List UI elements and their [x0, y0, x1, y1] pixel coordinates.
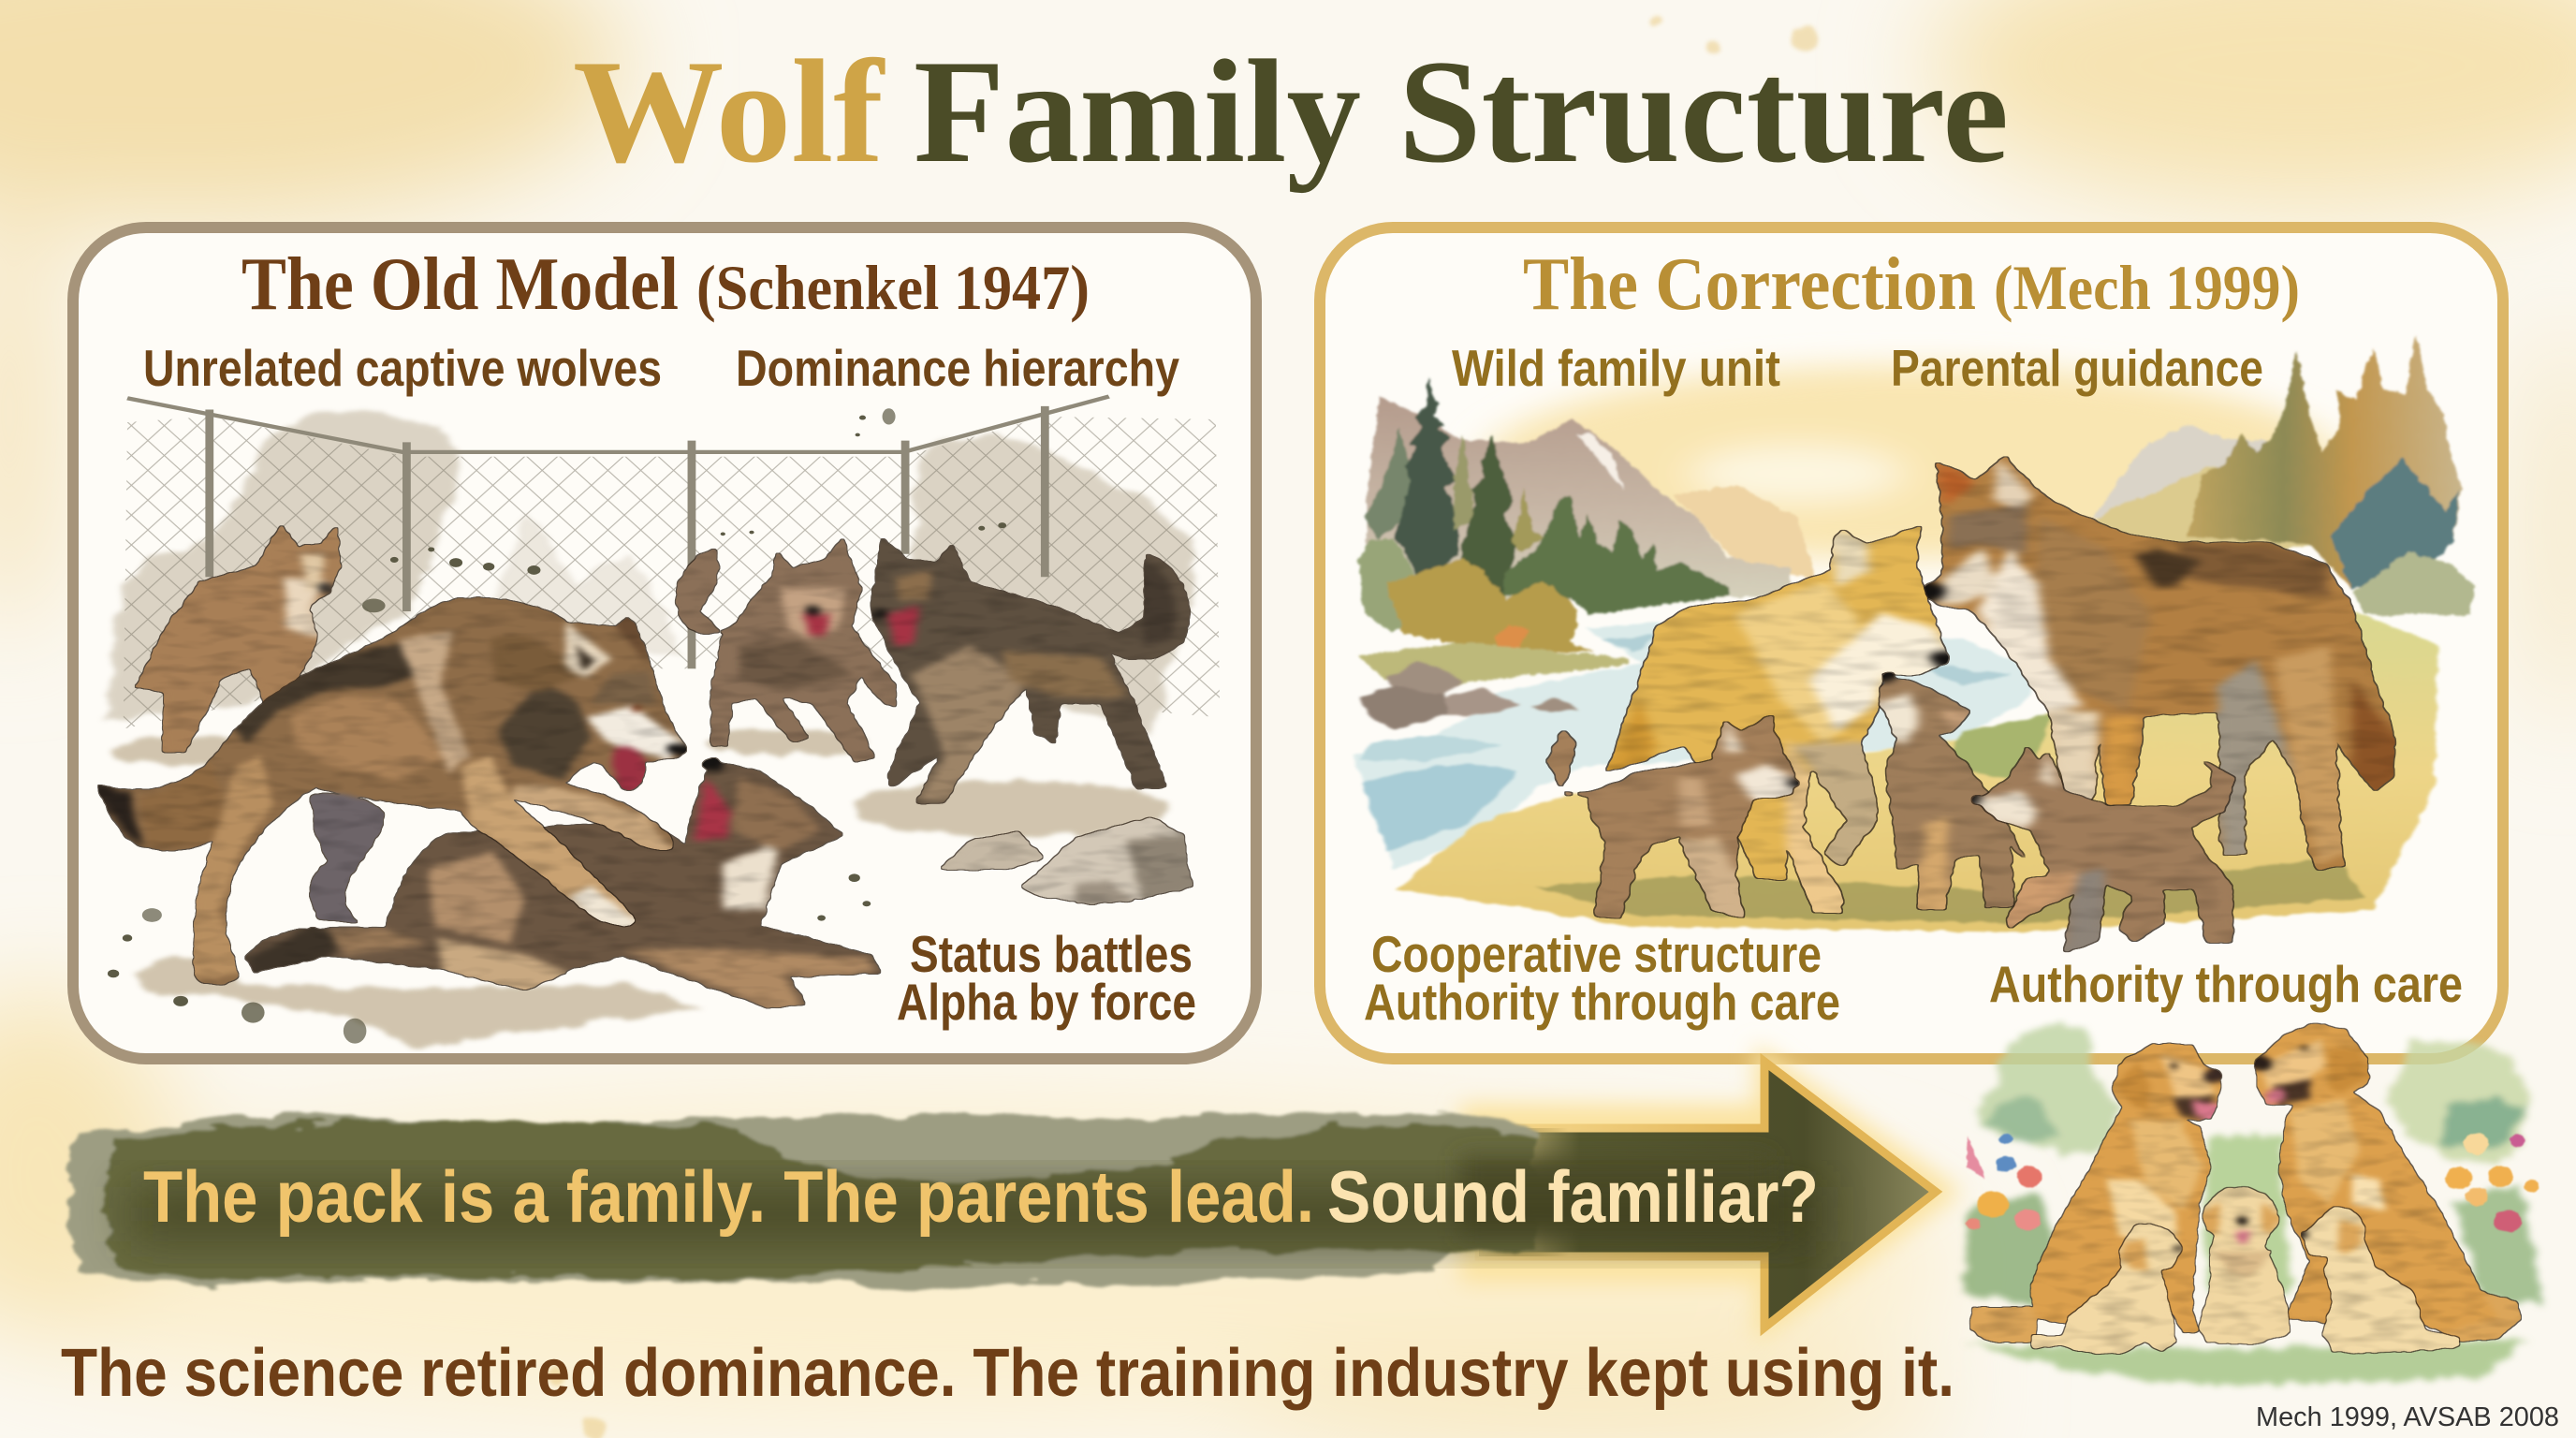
puppy: left [2031, 1225, 2182, 1355]
ink splatter [108, 408, 1006, 1044]
label: status battles: Status battles [910, 925, 1193, 983]
puppies [2031, 1187, 2459, 1355]
panel: the old model [73, 227, 1256, 1059]
flowers [1966, 1133, 2539, 1232]
heading: the correction: (Mech 1999) [1994, 252, 2300, 323]
wolf: dominant wolf standing over [97, 598, 687, 985]
illustration: golden retriever family [1962, 1023, 2542, 1386]
title: Family Structure [914, 30, 2009, 194]
panel frame [1320, 227, 2503, 1059]
banner text: Sound familiar? [1327, 1155, 1819, 1238]
wolf: large brown father [1923, 456, 2394, 870]
label: parental guidance: Parental guidance [1891, 339, 2263, 397]
illustration: wild wolf family in a valley [1354, 334, 2474, 951]
puppy: centre [2199, 1187, 2291, 1345]
heading: the old model: The Old Model [242, 243, 679, 326]
closing statement: The science retired dominance. The training industry kept using it. [61, 1336, 1954, 1411]
label: cooperative structure: Cooperative structure [1371, 925, 1822, 983]
banner: olive watercolor band with arrow [69, 1044, 1961, 1343]
heading: the old model: (Schenkel 1947) [696, 252, 1090, 323]
rocks [1360, 660, 1577, 729]
dog: right adult [2255, 1023, 2520, 1342]
illustration: captive wolves fighting in a fenced pen [107, 396, 1220, 1047]
panel frame [73, 227, 1256, 1059]
foliage [1962, 1025, 2542, 1386]
dog: left adult [1969, 1044, 2221, 1342]
title: Wolf [573, 30, 886, 194]
wolf: dark wolf on right [871, 538, 1190, 803]
label: dominance hierarchy: Dominance hierarchy [736, 339, 1179, 397]
panel: the correction [1320, 227, 2503, 1059]
wolf: background observer [136, 524, 340, 752]
source citation: Mech 1999, AVSAB 2008 [2256, 1402, 2559, 1432]
pup: left [1547, 715, 1798, 918]
wolf: submissive wolf on its back [245, 758, 881, 1008]
label: authority through care right: Authority through care [1989, 955, 2463, 1013]
label: wild family unit: Wild family unit [1452, 339, 1780, 397]
rocks [941, 817, 1192, 903]
wolf: golden mother [1606, 526, 1948, 912]
wolf: standing snarling wolf on right [677, 538, 896, 761]
meadow [1395, 611, 2438, 932]
right forest and mountains [2066, 334, 2474, 615]
banner text: The pack is a family. The parents lead. [143, 1155, 1314, 1238]
heading: the correction: The Correction [1523, 243, 1976, 326]
label: unrelated captive wolves: Unrelated captive wolves [143, 339, 662, 397]
river [1354, 623, 2033, 870]
pup: looking up [1879, 673, 2027, 909]
label: authority through care left: Authority through care [1364, 973, 1840, 1031]
pup: right [1972, 746, 2234, 951]
label: alpha by force: Alpha by force [897, 973, 1196, 1031]
chain-link fence [124, 396, 1220, 729]
puppy: right [2302, 1208, 2459, 1353]
left forest and mountains [1357, 377, 1816, 683]
